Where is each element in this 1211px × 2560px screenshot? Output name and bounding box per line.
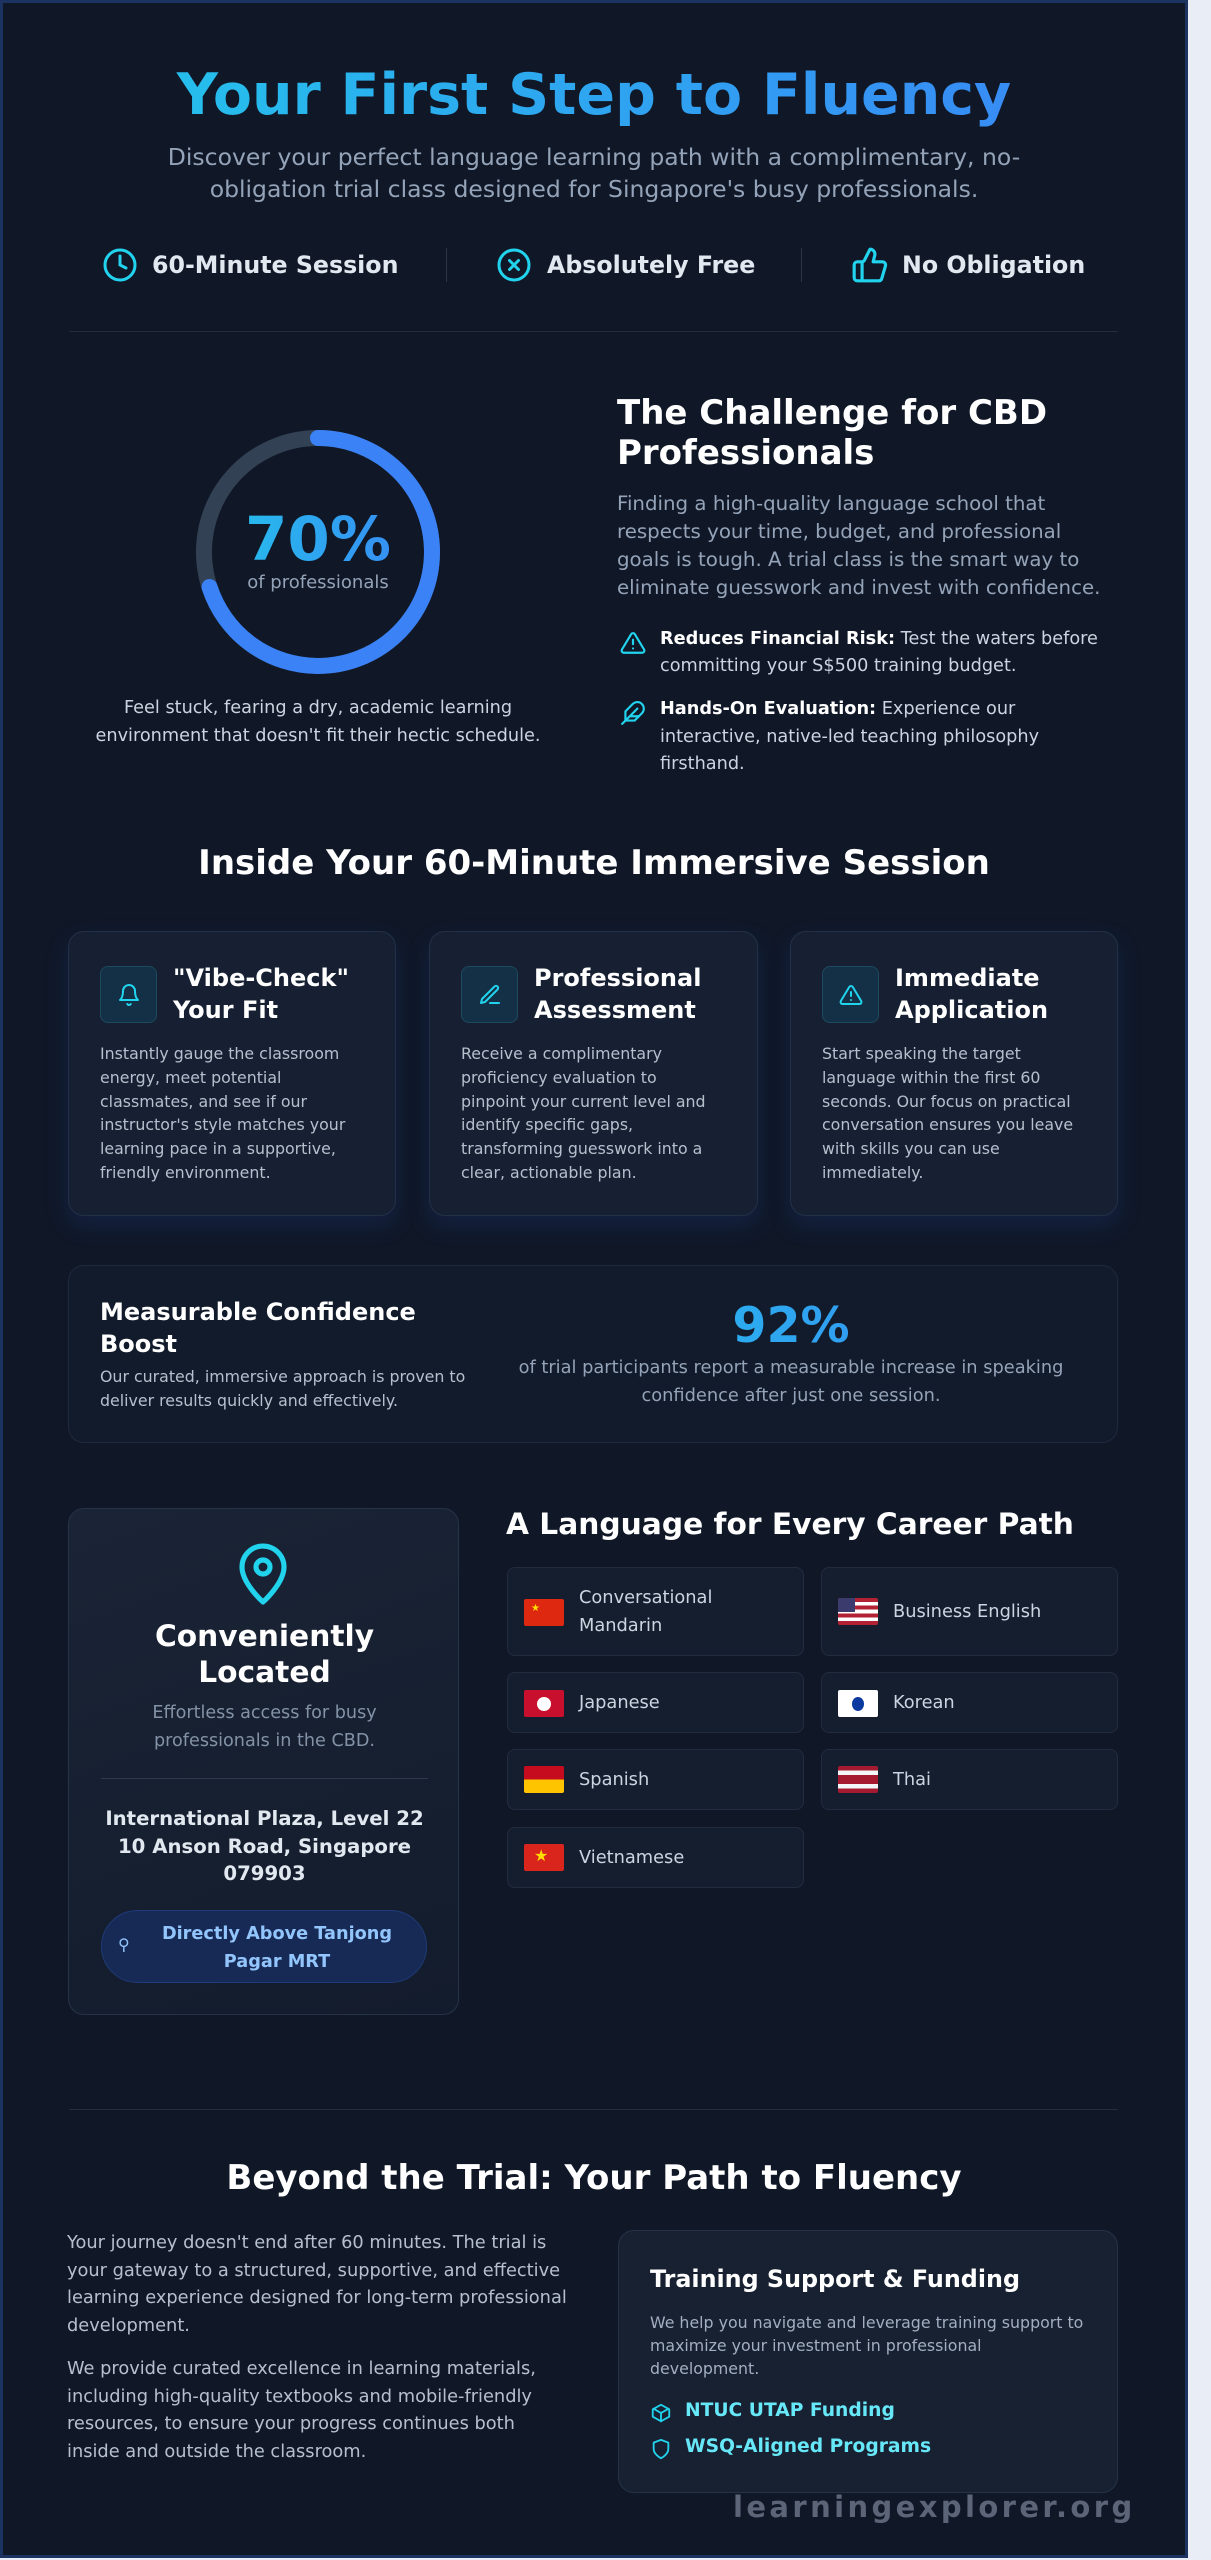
item: WSQ: WSQ-Aligned Programs — [685, 2436, 931, 2457]
lang: vietnamese — [507, 1827, 804, 1888]
feature row: 60-Minute Session — [152, 251, 398, 279]
address: International Plaza, Level 22 — [105, 1807, 424, 1830]
funding card: We help you navigate and leverage training support to — [650, 2313, 1083, 2332]
card: vibe-check: learning pace in a supportive, — [100, 1139, 336, 1158]
card: assessment: Receive a complimentary — [461, 1044, 662, 1063]
card: assessment: clear, actionable plan. — [461, 1163, 637, 1182]
card: application: seconds. Our focus on practical — [822, 1092, 1071, 1111]
lang: vietnamese: Vietnamese — [579, 1847, 684, 1868]
funding card: development. — [650, 2359, 759, 2378]
bullet: financial risk: committing your S$500 training budget. — [660, 656, 1016, 676]
challenge heading: The Challenge for CBD — [617, 393, 1047, 433]
card: assessment: Assessment — [534, 996, 696, 1024]
address: 079903 — [223, 1862, 306, 1885]
confidence title: Measurable Confidence — [100, 1298, 416, 1326]
card: vibe-check — [68, 931, 396, 1216]
donut chart: 70% — [245, 504, 391, 575]
beyond text: including high-quality textbooks and mobile-friendly — [67, 2386, 532, 2407]
bullet: hands-on — [621, 699, 1039, 774]
lang: vietnamese: ★ — [534, 1846, 548, 1865]
feature: no obligation — [852, 248, 1085, 282]
donut caption: Feel stuck, fearing a dry, academic learning — [124, 698, 512, 718]
bullet: hands-on: firsthand. — [660, 754, 745, 774]
funding card: Training Support & Funding — [650, 2265, 1020, 2293]
challenge text: respects your time, budget, and professional — [617, 520, 1061, 543]
card: vibe-check: Instantly gauge the classroom — [100, 1044, 339, 1063]
location heading: Conveniently — [155, 1619, 374, 1654]
card: assessment: proficiency evaluation to — [461, 1068, 657, 1087]
card: vibe-check: "Vibe-Check" — [173, 964, 349, 992]
card: vibe-check: friendly environment. — [100, 1163, 271, 1182]
challenge text — [617, 492, 1100, 599]
lang: mandarin: Conversational — [579, 1587, 712, 1608]
card: assessment: transforming guesswork into a — [461, 1139, 702, 1158]
beyond heading: Beyond the Trial: Your Path to Fluency — [226, 2158, 962, 2198]
lang: thai — [821, 1749, 1118, 1810]
card: application: immediately. — [822, 1163, 923, 1182]
MRT pill: Pagar MRT — [224, 1952, 330, 1972]
challenge panel — [617, 393, 1100, 774]
card: vibe-check: instructor's style matches your — [100, 1115, 345, 1134]
feature row: No Obligation — [902, 251, 1085, 279]
bullet: financial risk: Reduces Financial Risk: Test the waters before — [660, 629, 1098, 649]
lang: spanish: Spanish — [579, 1769, 649, 1790]
icon: pen — [461, 966, 518, 1023]
lang: mandarin: ★ — [531, 1603, 540, 1614]
lang: japanese — [507, 1672, 804, 1733]
funding card — [618, 2230, 1118, 2493]
icon: pin — [239, 1544, 287, 1605]
lang: english — [821, 1567, 1118, 1656]
MRT pill: Directly Above Tanjong — [162, 1924, 392, 1944]
card: assessment: Professional — [534, 964, 701, 992]
confidence title: Boost — [100, 1330, 177, 1358]
card: vibe-check: Your Fit — [173, 996, 278, 1024]
beyond text: learning experience designed for long-term professional — [67, 2287, 567, 2308]
session heading: Inside Your 60-Minute Immersive Session — [198, 843, 990, 883]
subtitle: obligation trial class designed for Singapore's busy professionals. — [210, 175, 978, 203]
item: UTAP: NTUC UTAP Funding — [685, 2400, 895, 2421]
feature row: Absolutely Free — [547, 251, 755, 279]
lang: mandarin — [507, 1567, 804, 1656]
lang: thai: Thai — [893, 1769, 931, 1790]
MRT pill: ⚲ — [118, 1935, 130, 1954]
stat 92%: of trial participants report a measurable increase in speaking — [519, 1357, 1063, 1378]
beyond text: development. We provide curated excellence in learning materials, — [67, 2315, 536, 2379]
confidence title — [100, 1298, 416, 1358]
donut caption: environment that doesn't fit their hectic schedule. — [95, 726, 541, 746]
confidence panel: deliver results quickly and effectively. — [100, 1391, 398, 1410]
stat 92% — [519, 1297, 1063, 1406]
card: application: Start speaking the target — [822, 1044, 1021, 1063]
donut caption — [95, 698, 541, 746]
bullet: financial risk — [620, 629, 1098, 676]
icon: bell — [100, 966, 157, 1023]
card: application: conversation ensures you leave — [822, 1115, 1073, 1134]
stat 92%: confidence after just one session. — [641, 1384, 941, 1406]
icon: alert — [822, 966, 879, 1023]
bullet: hands-on: interactive, native-led teaching philosophy — [660, 726, 1039, 746]
challenge text: Finding a high-quality language school that — [617, 492, 1045, 515]
card: application: Immediate — [895, 964, 1040, 992]
location card: professionals in the CBD. — [154, 1731, 375, 1751]
card: application: with skills you can use — [822, 1139, 1000, 1158]
card: application — [790, 931, 1118, 1216]
challenge text: goals is tough. A trial class is the smart way to — [617, 548, 1079, 571]
title: Your First Step to Fluency — [177, 62, 1011, 128]
donut chart: of professionals — [247, 572, 389, 593]
languages heading: A Language for Every Career Path — [506, 1507, 1074, 1542]
card: vibe-check: classmates, and see if our — [100, 1092, 307, 1111]
card: vibe-check: energy, meet potential — [100, 1068, 281, 1087]
lang: mandarin: Mandarin — [579, 1615, 662, 1636]
address: 10 Anson Road, Singapore — [118, 1835, 411, 1858]
bullet: hands-on: Hands-On Evaluation: Experience our — [660, 699, 1015, 719]
beyond text: your gateway to a structured, supportive, and effective — [67, 2260, 560, 2281]
challenge heading — [617, 393, 1047, 473]
feature row — [104, 248, 1085, 282]
confidence panel — [68, 1265, 1118, 1443]
watermark: learningexplorer.org — [733, 2490, 1136, 2524]
card: assessment: pinpoint your current level and — [461, 1092, 706, 1111]
lang: korean: Korean — [893, 1692, 955, 1713]
MRT pill — [101, 1910, 427, 1983]
card: application: language within the first 60 — [822, 1068, 1040, 1087]
lang: spanish — [507, 1749, 804, 1810]
beyond text: inside and outside the classroom. — [67, 2441, 366, 2462]
funding card: maximize your investment in professional — [650, 2336, 982, 2355]
language grid — [507, 1567, 1118, 1888]
lang: english: Business English — [893, 1601, 1041, 1622]
lang: japanese: Japanese — [579, 1692, 660, 1713]
card: application: Application — [895, 996, 1048, 1024]
lang: korean — [821, 1672, 1118, 1733]
subtitle — [168, 143, 1020, 203]
feature: 60-minute — [104, 248, 398, 282]
card: assessment: identify specific gaps, — [461, 1115, 633, 1134]
donut chart — [196, 430, 440, 674]
location heading: Located — [198, 1655, 331, 1690]
feature: free — [498, 248, 755, 282]
location heading — [155, 1619, 374, 1690]
card: assessment — [429, 931, 758, 1216]
location card: Effortless access for busy — [152, 1703, 377, 1723]
address — [105, 1807, 424, 1885]
challenge heading: Professionals — [617, 433, 874, 473]
beyond text: Your journey doesn't end after 60 minutes. The trial is — [67, 2232, 546, 2253]
stat 92%: 92% — [732, 1297, 850, 1354]
beyond text — [67, 2232, 567, 2462]
challenge text: eliminate guesswork and invest with confidence. — [617, 576, 1100, 599]
confidence panel: Our curated, immersive approach is proven to — [100, 1367, 465, 1386]
beyond text: resources, to ensure your progress continues both — [67, 2413, 515, 2434]
location card — [68, 1508, 459, 2015]
title — [0, 60, 1188, 130]
subtitle: Discover your perfect language learning path with a complimentary, no- — [168, 143, 1020, 171]
